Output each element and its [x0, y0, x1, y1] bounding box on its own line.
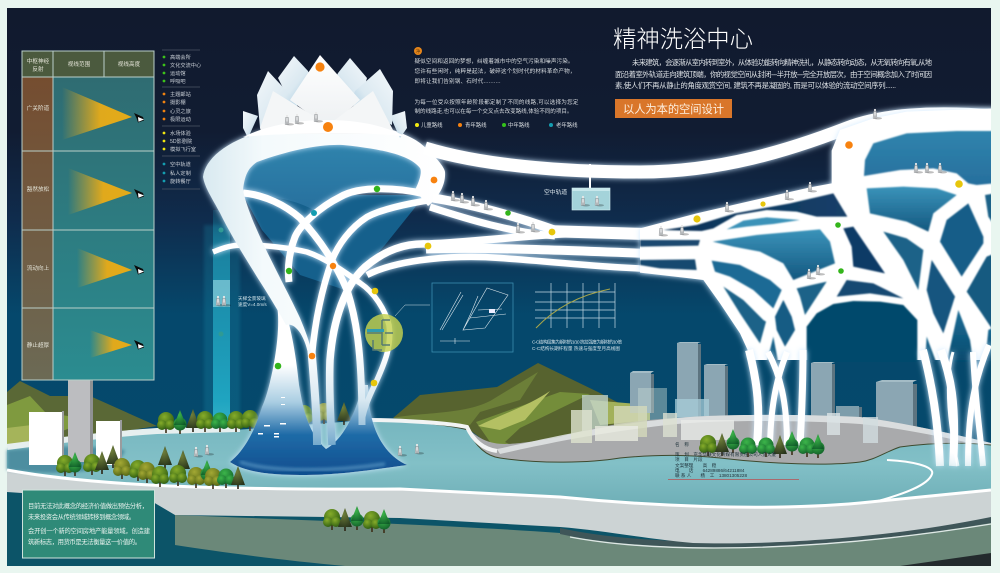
route legend: 儿童路线 — [421, 121, 443, 129]
sight cones — [62, 87, 132, 358]
grey city platform — [467, 415, 991, 470]
legend list of program spaces: 5D影剧院 — [170, 137, 193, 145]
elevator caption: 天梯全景玻璃 — [238, 295, 266, 302]
economic note panel: 筑新标志，用货币是无法衡量这一价值的。 — [28, 537, 141, 546]
right tower white mass — [640, 108, 995, 373]
mountain — [393, 363, 660, 452]
economic note panel: 目前无法对此概念的经济价值做出预估分析， — [28, 501, 148, 510]
project info text: 电 话 64289886/64211884 — [675, 467, 745, 474]
legend list of program spaces: 文化交流中心 — [170, 61, 201, 69]
legend list of program spaces: 模拟飞行室 — [170, 145, 196, 153]
panel: viewing range table — [22, 51, 154, 380]
panel: viewing range table: 视线高度 — [118, 60, 141, 68]
panel: viewing range table: 豁然放松 — [27, 185, 50, 193]
project info text: 名 称 — [675, 441, 689, 448]
intro paragraph: 未来建筑，会逐渐从室内转到室外，从体验功能转向精神洗礼，从静态转向动态，从无氧转向有氧,从地 — [632, 58, 933, 67]
legend list of program spaces: 私人定制 — [170, 169, 191, 177]
route description text: 制的线路走,也可以在每一个交叉点去改变路线,体验不同的项目。 — [414, 107, 572, 115]
panel: viewing range table: 视线范围 — [68, 60, 91, 68]
route legend: 青年路线 — [465, 121, 487, 129]
orange slogan badge — [615, 99, 732, 118]
blue bowl left — [240, 142, 425, 214]
lotus crown — [243, 55, 407, 138]
line chart: C-C结构长期纤程量 热速与强度至月高线图 — [532, 345, 620, 352]
ribbon network — [203, 108, 995, 475]
economic note panel: 未来投资会从传统领域转移到概念领域。 — [28, 512, 135, 521]
economic note panel: 会开创一个新的空间房地产能量领域，创造建 — [28, 526, 151, 535]
elevator caption — [238, 295, 267, 308]
legend list of program spaces: 旋转餐厅 — [170, 177, 191, 185]
callout: joint detail — [365, 305, 430, 352]
structure diagram — [432, 283, 513, 352]
legend list of program spaces — [162, 50, 201, 189]
economic note panel — [22, 490, 154, 558]
project info text — [668, 441, 799, 480]
project info text: 策 划 京华华联文化传媒有限责任公司人造大厦 — [675, 451, 776, 458]
route description text: 疑似空间和返回的梦想，纠缠着城市中的空气污染和噪声污染。 — [414, 57, 574, 65]
intro paragraph: 素,使人们不再从静止的角度观赏空间, 建筑不再是凝固的, 而是可以体验的流动空间序列...... — [615, 81, 896, 90]
legend list of program spaces: 心灵之旅 — [170, 107, 191, 115]
intro paragraph — [615, 58, 933, 90]
project info text: 文案整理 高 稳 — [675, 462, 717, 469]
legend list of program spaces: 摄影棚 — [170, 98, 186, 106]
line chart: C-C结构层集为钢材的1/10 抗拉强度为钢材的10倍 — [532, 338, 622, 346]
left mountain — [7, 381, 157, 450]
funnel dashes — [258, 397, 286, 438]
left buildings — [29, 371, 122, 465]
sky gondola — [544, 164, 610, 210]
sky gondola: 空中轨道 — [544, 188, 567, 196]
city buildings — [582, 342, 917, 438]
title: 精神洗浴中心 — [613, 26, 753, 52]
foreground trees city — [699, 429, 824, 458]
panel: viewing range table: 流动向上 — [27, 264, 50, 272]
route description text: 您许有些闲时，纯粹是起法，破碎这个划时代的材料革命产物， — [414, 67, 576, 75]
top of the bowl over crown — [243, 120, 407, 137]
legend list of program spaces: 高端会所 — [170, 53, 191, 61]
legend list of program spaces: 极限运动 — [170, 115, 191, 123]
legend list of program spaces: 运动馆 — [170, 69, 186, 77]
route description text: 即将让我们告别钢、石时代.......... — [414, 77, 501, 85]
interior tint of left tower — [243, 195, 425, 290]
long upper ribbon — [425, 114, 995, 172]
intro paragraph: 面沿着室外轨道走向建筑顶端，你的视觉空间从封闭---半开放---完全开放层次，由于空间概念加入了时间因 — [615, 70, 932, 79]
base strata: grey rim — [7, 470, 991, 543]
route legend: 中年路线 — [508, 121, 530, 129]
elevator caption: 速度V=4.0m/s — [238, 301, 267, 308]
base strata: dark and white stripes — [560, 516, 991, 566]
route dots — [275, 62, 963, 386]
ribbon legs — [749, 345, 989, 466]
left tower strands — [213, 189, 600, 445]
panel: viewing range table: 中枢神经 — [27, 57, 50, 65]
base strata: lower green slab — [175, 515, 991, 566]
route legend — [415, 121, 578, 129]
lake — [7, 420, 991, 507]
panel: viewing range table: 静止超厚 — [27, 341, 50, 349]
panel: viewing range table: 广关阶道 — [27, 104, 50, 112]
visitors — [194, 109, 947, 458]
right tower cells — [640, 131, 995, 377]
foreground trees left — [56, 445, 245, 489]
foreground trees bottom — [323, 506, 390, 533]
project info text: 联 系 人 杨 工 13801305228 — [675, 472, 747, 479]
route legend: 老年路线 — [556, 121, 578, 129]
base strata: teal foundation — [7, 470, 991, 566]
route description text: 为每一位受众按照年龄阶段都定制了不同的线路,可以选择为您定 — [414, 98, 579, 106]
trees behind the funnel — [157, 402, 351, 434]
intro icon — [414, 47, 422, 55]
funnel and stem — [230, 305, 407, 475]
legend list of program spaces: 水场体验 — [170, 129, 192, 137]
legend list of program spaces: 主题邮站 — [170, 90, 191, 98]
route description text — [414, 57, 579, 115]
intro icon: 净 — [415, 48, 421, 55]
legend list of program spaces: 空中轨道 — [170, 160, 191, 168]
ribbons linking towers — [367, 198, 700, 275]
main bowl band — [203, 120, 445, 358]
project info text: 项 目 片段 — [675, 456, 703, 463]
platform pale ring — [497, 415, 991, 454]
pale front buildings — [571, 406, 878, 443]
legend list of program spaces: 呼吸吧 — [170, 78, 186, 85]
panel: viewing range table: 反射 — [32, 65, 44, 73]
orange slogan badge: 以人为本的空间设计 — [623, 102, 724, 116]
line chart — [532, 283, 622, 352]
glass elevator beam — [204, 210, 240, 463]
